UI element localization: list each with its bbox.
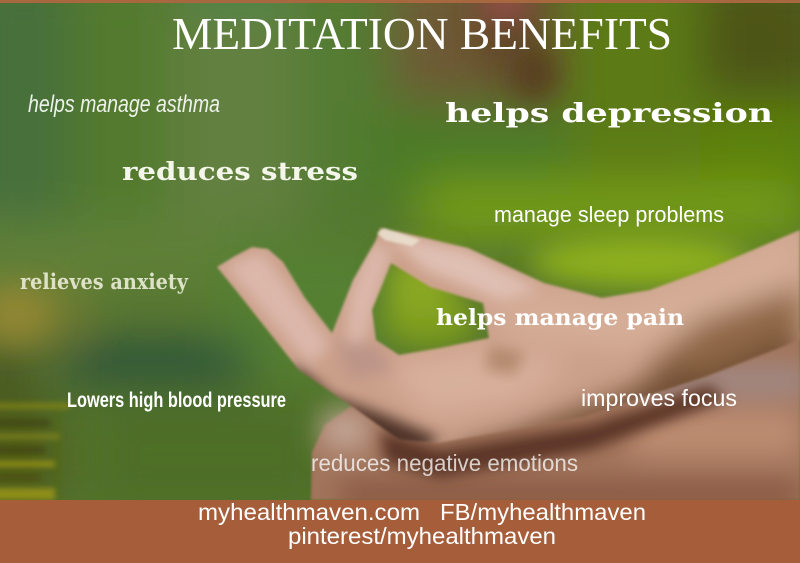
benefit: manage sleep problems: manage sleep problems	[494, 202, 724, 227]
benefit: helps depression: helps depression	[445, 99, 773, 129]
benefit: reduces stress: reduces stress	[122, 157, 358, 186]
footer credits: pinterest/myhealthmaven	[288, 523, 556, 549]
benefit: relieves anxiety: relieves anxiety	[20, 269, 189, 294]
footer bar	[0, 500, 800, 563]
benefit: helps manage pain: helps manage pain	[436, 305, 684, 331]
benefit: improves focus: improves focus	[581, 385, 737, 411]
photo: seated leg behind the hand	[311, 330, 800, 500]
footer credits	[198, 499, 646, 549]
benefit: reduces negative emotions: reduces negative emotions	[311, 450, 578, 476]
footer credits: FB/myhealthmaven	[440, 499, 646, 525]
benefit: lowers high blood pressure: Lowers high blood pressure	[67, 389, 286, 412]
title: MEDITATION BENEFITS	[172, 8, 672, 59]
thumb nail highlight	[377, 228, 420, 246]
photo: hand in meditation mudra	[216, 226, 800, 444]
benefit: helps manage asthma: helps manage asthma	[28, 91, 220, 118]
top edge strip	[0, 0, 800, 3]
footer credits: myhealthmaven.com	[198, 499, 420, 525]
